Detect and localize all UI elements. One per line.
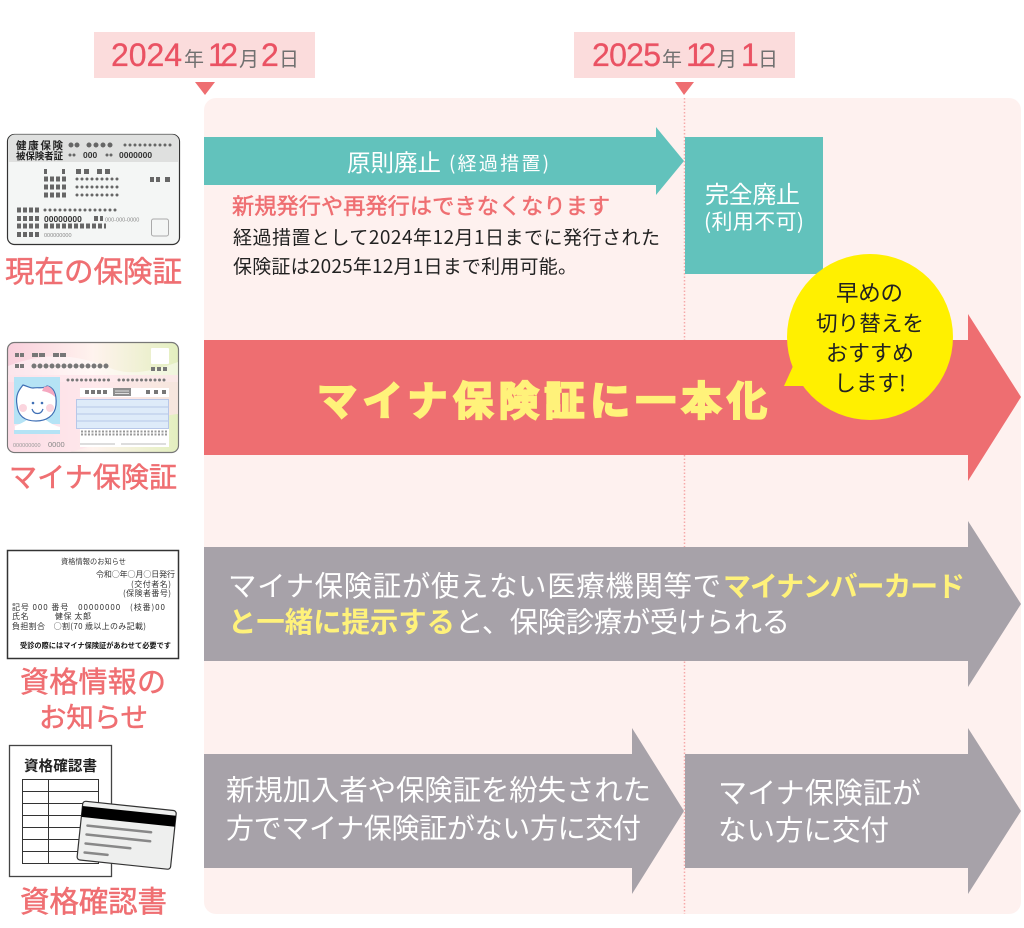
icon: insurance card back	[77, 801, 176, 870]
document: eligibility notice: 資格情報のお知らせ	[61, 557, 126, 567]
arrow: qualification certificate after 2025: ない方に交付	[718, 808, 889, 849]
label: current insurance card: 現在の保険証	[5, 249, 182, 291]
document: eligibility notice: 令和○年○月○日発行	[96, 569, 175, 580]
arrow: eligibility notice usage: マイナンバーカード	[723, 565, 965, 605]
icon: cat portrait	[14, 377, 60, 434]
card: My Number insurance card: 000000000	[13, 443, 41, 449]
date label: 2024-12-02	[94, 32, 315, 95]
callout: recommend early switch: 切り替えを	[816, 307, 924, 338]
card: current insurance card: 000	[83, 150, 97, 160]
arrow: unify to My Number insurance card: マイナ保険証に一本化	[317, 369, 767, 427]
label: eligibility notice: 資格情報の	[20, 659, 166, 701]
callout: recommend early switch: します!	[834, 366, 906, 398]
arrow: eligibility notice usage: マイナ保険証が使えない医療機関等で	[228, 564, 721, 605]
label: qualification certificate: 資格確認書	[20, 879, 167, 921]
date label: 2024-12-02: 2	[261, 37, 279, 73]
arrow: gradual abolition: 原則廃止	[347, 144, 441, 178]
arrow: eligibility notice usage: と一緒に提示する	[228, 600, 455, 641]
date label: 2025-12-01: 2025	[592, 37, 661, 73]
arrow: qualification certificate until 2025: 方でマイナ保険証がない方に交付	[226, 807, 641, 847]
label: eligibility notice: お知らせ	[39, 695, 148, 735]
document: eligibility notice: (交付者名)	[131, 579, 171, 590]
arrow: qualification certificate until 2025	[204, 728, 684, 894]
card: current insurance card: 000000000	[44, 233, 72, 239]
document: qualification certificate with card: 資格確認書	[24, 755, 97, 776]
document: eligibility notice: 記号 000 番号 00000000 (枝番)00	[12, 602, 166, 613]
date label: 2024-12-02: 日	[279, 43, 299, 72]
date label: 2025-12-01	[574, 32, 795, 95]
text: no new issuance: 新規発行や再発行はできなくなります	[232, 189, 610, 221]
card: My Number insurance card: 0000	[48, 440, 65, 449]
document: eligibility notice: 氏名 健保 太郎	[12, 611, 91, 622]
callout: recommend early switch: おすすめ	[826, 336, 914, 368]
document: eligibility notice: 負担割合 ○割(70 歳以上のみ記載)	[12, 621, 146, 632]
date label: 2025-12-01: 12	[686, 37, 716, 73]
card: current insurance card	[8, 134, 180, 244]
arrow: eligibility notice usage: と、保険診療が受けられる	[455, 600, 790, 641]
callout: recommend early switch	[784, 254, 953, 420]
arrow: gradual abolition: (経過措置)	[449, 149, 549, 176]
arrow: qualification certificate until 2025: 新規加入者や保険証を紛失された	[226, 768, 651, 809]
arrow: gradual abolition	[204, 127, 684, 195]
callout: recommend early switch: 早めの	[836, 276, 903, 308]
text: transitional measure	[233, 223, 660, 279]
document: eligibility notice: (保険者番号)	[123, 588, 171, 599]
card: current insurance card: 健康保険	[16, 138, 64, 153]
date label: 2024-12-02: 12	[208, 37, 238, 73]
arrow: qualification certificate after 2025: マイナ保険証が	[718, 770, 921, 812]
card: current insurance card: 00000000	[44, 214, 82, 224]
date label: 2025-12-01: 日	[758, 43, 778, 72]
date label: 2024-12-02: 年	[184, 43, 204, 72]
text: transitional measure: 経過措置として2024年12月1日までに発行された	[233, 223, 660, 250]
panel: timeline background	[204, 98, 1021, 914]
card: current insurance card: 被保険者証	[16, 148, 63, 162]
date label: 2025-12-01: 年	[662, 43, 682, 72]
card: My Number insurance card	[8, 342, 178, 452]
box: complete abolition: 完全廃止	[705, 175, 800, 210]
document: qualification certificate with card	[10, 746, 176, 876]
arrow: qualification certificate after 2025	[685, 728, 1021, 894]
date label: 2024-12-02: 2024	[111, 37, 182, 73]
label: eligibility notice	[20, 659, 166, 735]
text: transitional measure: 保険証は2025年12月1日まで利用可能。	[233, 252, 577, 279]
box: complete abolition: (利用不可)	[704, 206, 804, 236]
date label: 2024-12-02: 月	[239, 43, 259, 72]
card: current insurance card: 0000000	[119, 150, 152, 160]
arrow: unify to My Number insurance card	[204, 314, 1021, 481]
date label: 2025-12-01: 1	[741, 37, 759, 73]
document: eligibility notice	[8, 550, 178, 658]
document: eligibility notice: 受診の際にはマイナ保険証があわせて必要です	[20, 641, 171, 651]
date label: 2025-12-01: 月	[717, 43, 737, 72]
box: complete abolition	[685, 137, 823, 274]
arrow: eligibility notice usage	[204, 521, 1021, 687]
label: My Number insurance card: マイナ保険証	[9, 456, 177, 496]
card: current insurance card: 000-000-0000	[105, 218, 139, 224]
